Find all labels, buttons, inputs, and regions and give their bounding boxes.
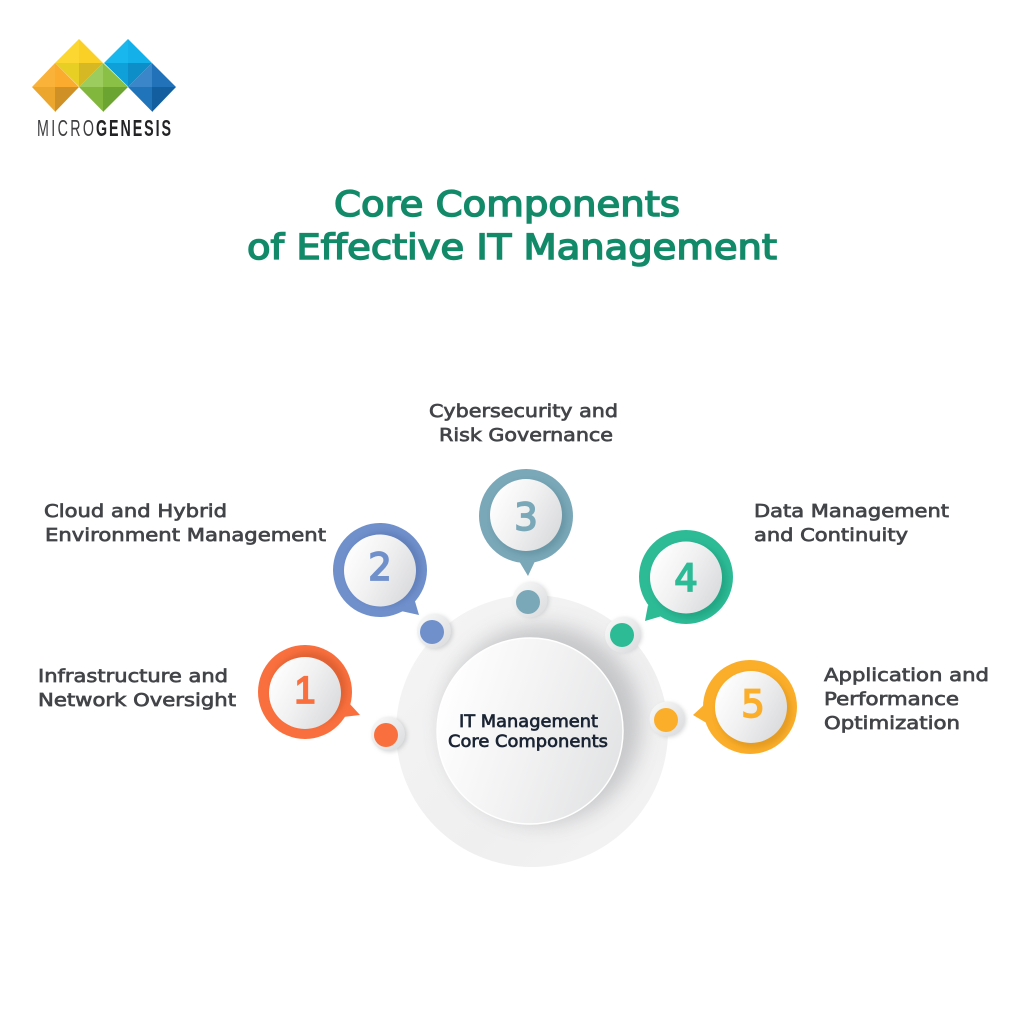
bubble 1 — [258, 645, 360, 739]
label 2 — [44, 501, 326, 546]
label 3 — [429, 401, 618, 446]
logo icon: faceted diamonds — [32, 39, 176, 112]
bubble 5: 5 — [741, 683, 765, 726]
bubble 4: 4 — [674, 557, 698, 600]
hub: central circle — [396, 595, 668, 867]
label 5 — [824, 665, 989, 734]
label 4: and Continuity — [754, 525, 908, 546]
outer disc — [396, 595, 668, 867]
label 5: Performance — [824, 689, 959, 710]
bubble 5 — [693, 660, 797, 754]
label 5: Application and — [824, 665, 989, 686]
hub label: Core Components — [448, 732, 608, 752]
title — [247, 185, 777, 268]
label 4 — [754, 501, 949, 546]
logo: Microgenesis — [32, 39, 176, 142]
inner disc shadow — [443, 625, 641, 823]
title: Core Components — [334, 185, 680, 225]
inner disc — [437, 638, 623, 824]
bubble 1: 1 — [294, 670, 316, 712]
bubble 3 — [479, 469, 573, 576]
label 1 — [38, 666, 236, 711]
hub label — [448, 712, 608, 752]
bubble 2 — [333, 523, 427, 617]
hub label: IT Management — [459, 712, 598, 732]
bubble 3: 3 — [514, 496, 538, 539]
logo wordmark: MICRO — [37, 117, 94, 142]
node 5 — [650, 702, 686, 737]
label 5: Optimization — [824, 713, 960, 734]
label 2: Environment Management — [45, 525, 326, 546]
label 1: Infrastructure and — [38, 666, 228, 687]
label 3: Cybersecurity and — [429, 401, 618, 422]
label 3: Risk Governance — [439, 425, 613, 446]
bubble 4 — [639, 530, 733, 624]
bubble 2: 2 — [368, 546, 392, 589]
label 2: Cloud and Hybrid — [44, 501, 227, 522]
label 1: Network Oversight — [38, 690, 236, 711]
logo wordmark — [37, 117, 171, 142]
node 2 — [417, 614, 453, 649]
label 4: Data Management — [754, 501, 949, 522]
node 4 — [605, 617, 642, 653]
node 1 — [371, 717, 407, 752]
node 3 — [512, 582, 549, 618]
logo wordmark: GENESIS — [96, 117, 171, 142]
title: of Effective IT Management — [247, 228, 777, 268]
